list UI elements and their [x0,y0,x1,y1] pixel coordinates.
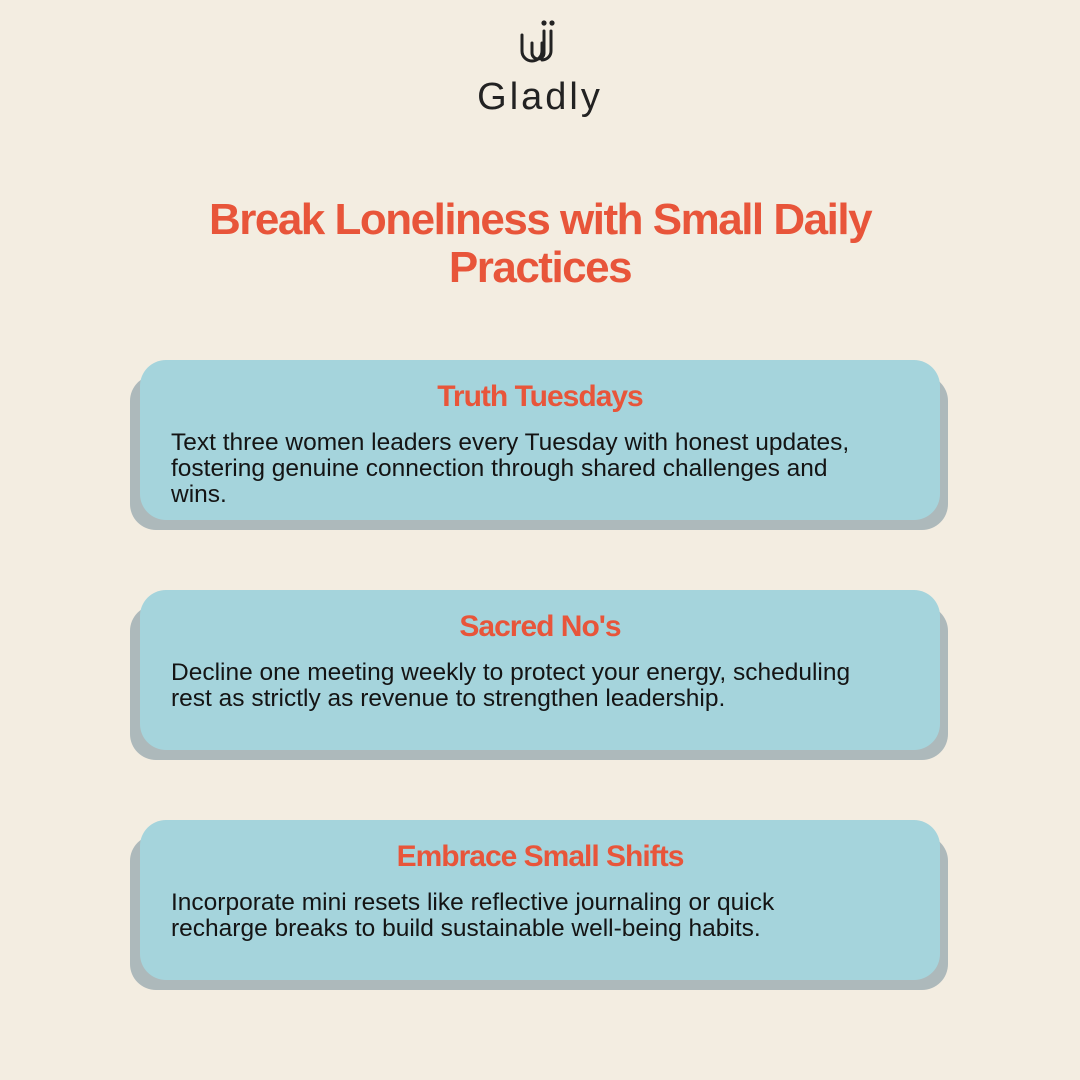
panel: Truth Tuesdays [130,360,948,530]
text: wins. [171,481,227,508]
panel: Sacred No's [130,590,948,760]
icon: logo mark [520,20,555,62]
title [209,195,872,292]
panel: Embrace Small Shifts [130,820,948,990]
heading: Truth Tuesdays [437,380,643,413]
title: Practices [449,243,631,292]
text: fostering genuine connection through shared challenges and [171,455,828,482]
logo [477,20,603,118]
text [171,659,850,712]
text: Text three women leaders every Tuesday with honest updates, [171,429,849,456]
text: recharge breaks to build sustainable well-being habits. [171,915,761,942]
heading: Embrace Small Shifts [397,840,683,873]
text [171,429,849,508]
logo text: Gladly [477,76,603,118]
title: Break Loneliness with Small Daily [209,195,871,244]
text: Incorporate mini resets like reflective journaling or quick [171,889,774,916]
text: rest as strictly as revenue to strengthen leadership. [171,685,725,712]
text: Decline one meeting weekly to protect your energy, scheduling [171,659,850,686]
heading: Sacred No's [459,610,621,643]
text [171,889,774,942]
